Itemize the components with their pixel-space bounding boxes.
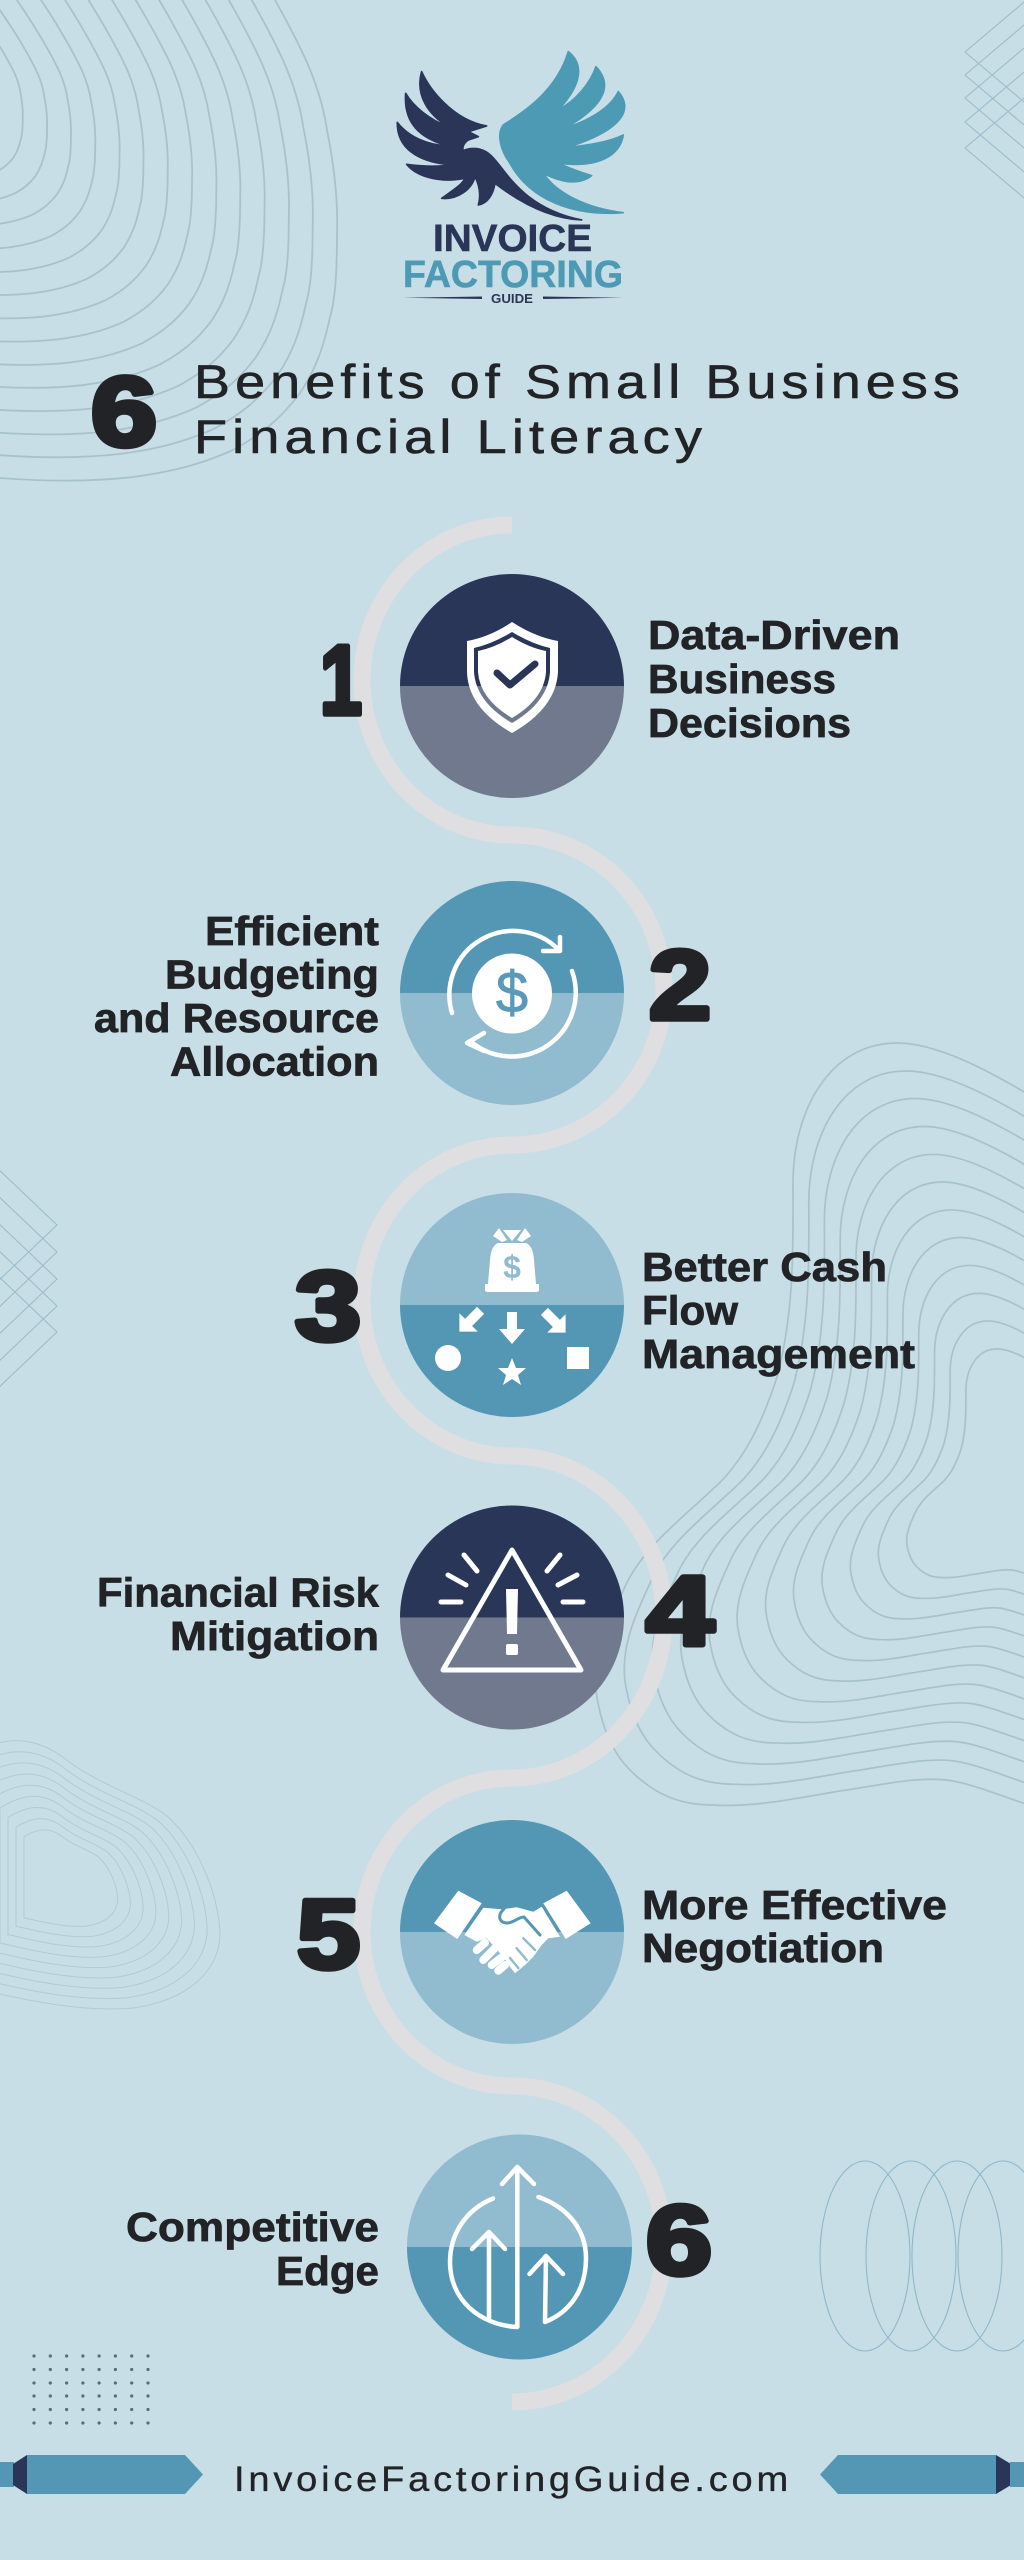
title line 1: Benefits of Small Business <box>194 356 965 409</box>
label 2: Efficient <box>205 908 379 954</box>
label 4: Financial Risk <box>97 1570 379 1616</box>
icon: shield with check <box>467 622 558 733</box>
decoration: left lattice <box>0 1165 57 1392</box>
logo: Invoice Factoring Guide <box>397 52 625 306</box>
decoration: bottom-right overlapping ellipses <box>820 2161 1024 2351</box>
decoration: top-right lattice <box>965 0 1024 203</box>
label 3: Management <box>642 1331 915 1377</box>
number 2: 2 <box>649 930 711 1040</box>
circle 3 <box>400 1193 624 1417</box>
decoration: bottom-left contour lines <box>0 1741 220 2009</box>
number 3: 3 <box>295 1251 361 1361</box>
label 4: Mitigation <box>170 1613 379 1659</box>
icon: dollar coin with cycle arrows <box>449 931 576 1056</box>
decoration: top-left contour lines <box>0 0 337 480</box>
icon: handshake <box>434 1891 591 1973</box>
decoration: dot grid <box>32 2354 150 2425</box>
icon: money bag with allocation arrows <box>435 1228 589 1385</box>
label 1: Data-Driven <box>648 612 900 658</box>
label 2: Allocation <box>170 1038 379 1084</box>
logo text: invoice: INVOICE <box>433 218 592 260</box>
label 1 <box>648 612 900 746</box>
label 6: Competitive <box>126 2204 379 2250</box>
label 2 <box>94 908 379 1084</box>
right ribbon <box>820 2455 1024 2494</box>
website text: InvoiceFactoringGuide.com <box>234 2460 792 2499</box>
step 4 <box>97 1506 714 1730</box>
label 4 <box>97 1570 379 1659</box>
label 5 <box>642 1882 947 1971</box>
icon: growth arrows <box>450 2167 586 2327</box>
step 5 <box>297 1820 947 2044</box>
icon: warning triangle <box>441 1550 583 1670</box>
circle 1 <box>400 574 624 798</box>
label 5: More Effective <box>642 1882 947 1928</box>
step 1 <box>320 574 900 798</box>
logo text: guide: GUIDE <box>491 291 533 306</box>
label 5: Negotiation <box>642 1925 884 1971</box>
logo text: factoring: FACTORING <box>403 254 623 296</box>
circle 4 <box>400 1506 624 1730</box>
label 3: Flow <box>642 1288 738 1334</box>
label 3: Better Cash <box>642 1244 887 1290</box>
label 1: Business <box>648 656 836 702</box>
decoration: right contour lines <box>596 1043 1024 1830</box>
step 3 <box>295 1193 915 1417</box>
left ribbon <box>0 2455 203 2494</box>
number 5: 5 <box>297 1879 360 1989</box>
title <box>91 356 965 466</box>
circle 5 <box>400 1820 624 2044</box>
label 2: and Resource <box>94 995 379 1041</box>
icon: dollar coin with cycle arrows: $ <box>496 960 528 1025</box>
step 2 <box>94 881 711 1105</box>
label 6 <box>126 2204 379 2294</box>
number 1: 1 <box>320 625 362 735</box>
label 2: Budgeting <box>165 952 379 998</box>
title line 2: Financial Literacy <box>194 411 707 464</box>
number 4: 4 <box>646 1556 714 1666</box>
circle 2 <box>400 881 624 1105</box>
number 6: 6 <box>646 2185 712 2295</box>
label 6: Edge <box>276 2248 379 2294</box>
footer <box>0 2455 1024 2499</box>
step 6 <box>126 2134 712 2360</box>
circle 6 <box>407 2134 632 2360</box>
icon: eagle logo mark <box>397 52 625 220</box>
label 1: Decisions <box>648 700 851 746</box>
label 3 <box>642 1244 915 1377</box>
icon: money bag with allocation arrows: $ <box>503 1249 521 1285</box>
winding path connector <box>362 525 664 2402</box>
title numeral 6: 6 <box>91 356 157 466</box>
